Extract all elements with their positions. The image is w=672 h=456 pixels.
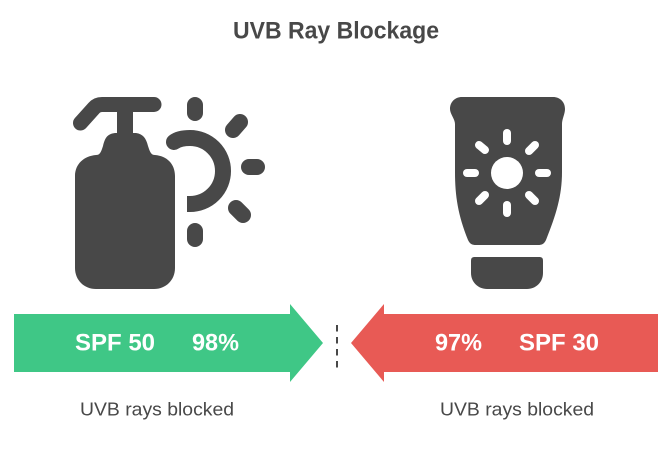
sun symbol [491, 157, 523, 189]
title: UVB Ray Blockage [233, 18, 439, 44]
tube body [450, 97, 565, 245]
label: SPF 50: SPF 50 [75, 330, 155, 356]
pump head [80, 104, 154, 123]
green arrow: SPF 50 [14, 304, 323, 382]
bottle [75, 133, 175, 289]
value: 97%: 97% [435, 330, 482, 356]
sun arc flat end cover [176, 194, 187, 214]
tube cap [471, 257, 543, 289]
sun arc [174, 138, 223, 204]
caption right: UVB rays blocked [440, 400, 594, 420]
center dashed divider [336, 325, 338, 368]
value: 98%: 98% [192, 330, 239, 356]
label: SPF 30: SPF 30 [519, 330, 599, 356]
sun symbol rays [467, 133, 547, 213]
icon: sunscreen tube [450, 97, 565, 289]
sun rays [195, 105, 257, 239]
icon: pump bottle with sun [75, 104, 257, 289]
caption left: UVB rays blocked [80, 400, 234, 420]
pump stem [117, 105, 133, 137]
red arrow: SPF 30 [351, 304, 658, 382]
